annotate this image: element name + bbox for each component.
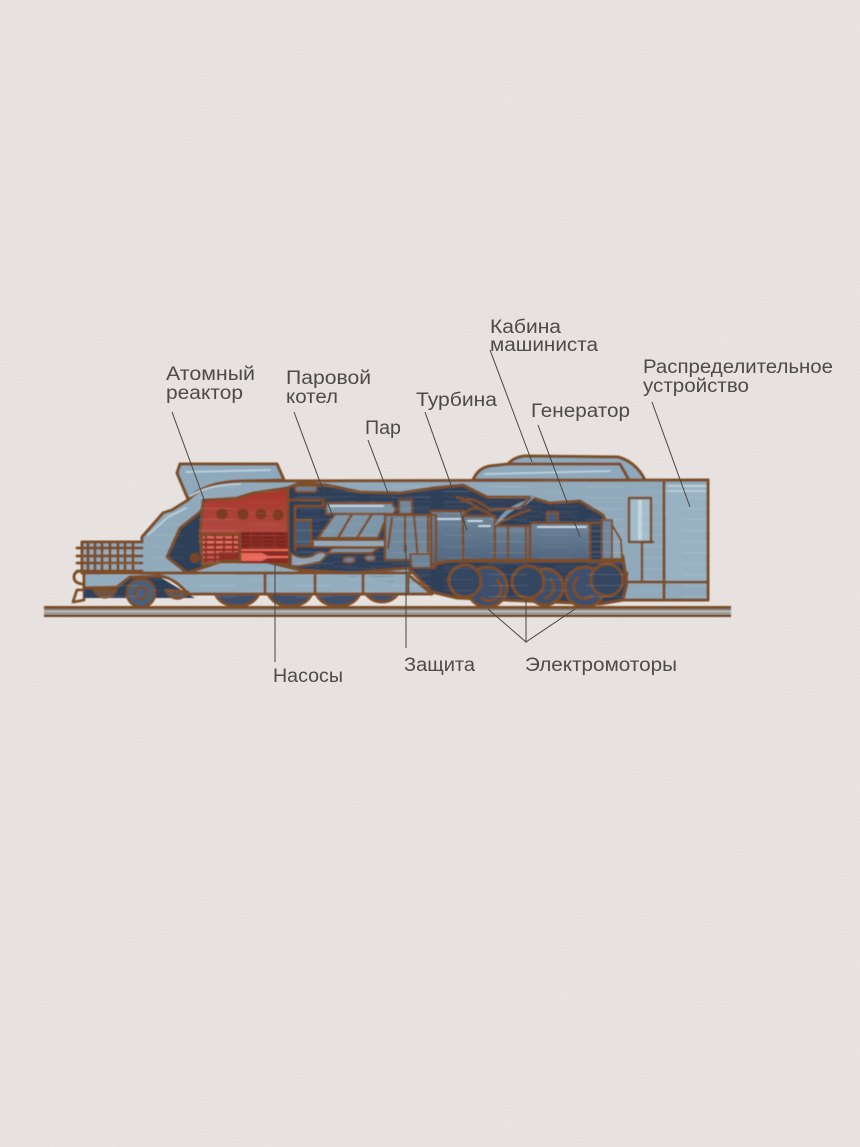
label: generator: Генератор [531, 401, 630, 422]
illustration: nuclear locomotive [44, 456, 731, 617]
reactor [190, 488, 288, 566]
generator [432, 510, 622, 565]
leader: switchgear [652, 402, 690, 507]
label: switchgear line 2: устройство [643, 376, 749, 397]
cab roof [473, 456, 645, 480]
label: reactor: Атомный [166, 364, 255, 385]
leader: turbine [425, 412, 467, 530]
label: shielding: Защита [404, 655, 475, 676]
leader: reactor [172, 412, 205, 502]
leader lines [172, 350, 690, 662]
steam pipes and high-pressure stage [385, 500, 440, 568]
streamlined body shell [82, 480, 708, 600]
leader: shielding [405, 545, 407, 648]
front roof cowl [177, 464, 284, 499]
shielding bricks [201, 534, 240, 565]
leader: electric motors [488, 600, 575, 642]
leader: steam [368, 440, 388, 493]
cab door and window [623, 480, 708, 600]
leader: pumps [274, 563, 276, 662]
reactor ports [216, 508, 284, 520]
label: switchgear: Распределительное [643, 357, 833, 378]
label: electric motors: Электромоторы [525, 655, 677, 676]
leader: cab [490, 350, 532, 462]
lower platform [84, 573, 432, 594]
label: steam: Пар [365, 418, 401, 439]
label: boiler line 2: котел [286, 387, 338, 408]
label: boiler: Паровой [286, 368, 371, 389]
cowcatcher and buffer [73, 571, 84, 602]
leader: generator [538, 425, 580, 537]
front undercarriage shadow [84, 577, 195, 598]
metal texture [82, 480, 708, 600]
label: pumps: Насосы [273, 666, 343, 687]
turbine [431, 497, 532, 566]
pump panel [241, 532, 288, 563]
label: turbine: Турбина [416, 390, 497, 411]
leader: boiler [294, 412, 333, 517]
rails [44, 606, 731, 617]
dark cutaway interior [167, 483, 627, 604]
steam boiler [289, 486, 396, 566]
radiator grille [77, 542, 142, 573]
label: cab line 2: машиниста [490, 335, 598, 356]
roof highlights [148, 470, 610, 535]
front wheels [94, 579, 188, 607]
label: reactor line 2: реактор [166, 383, 243, 404]
label: cab: Кабина [490, 317, 561, 338]
small running wheels [215, 594, 398, 606]
driving wheels with electric motors [449, 564, 623, 607]
